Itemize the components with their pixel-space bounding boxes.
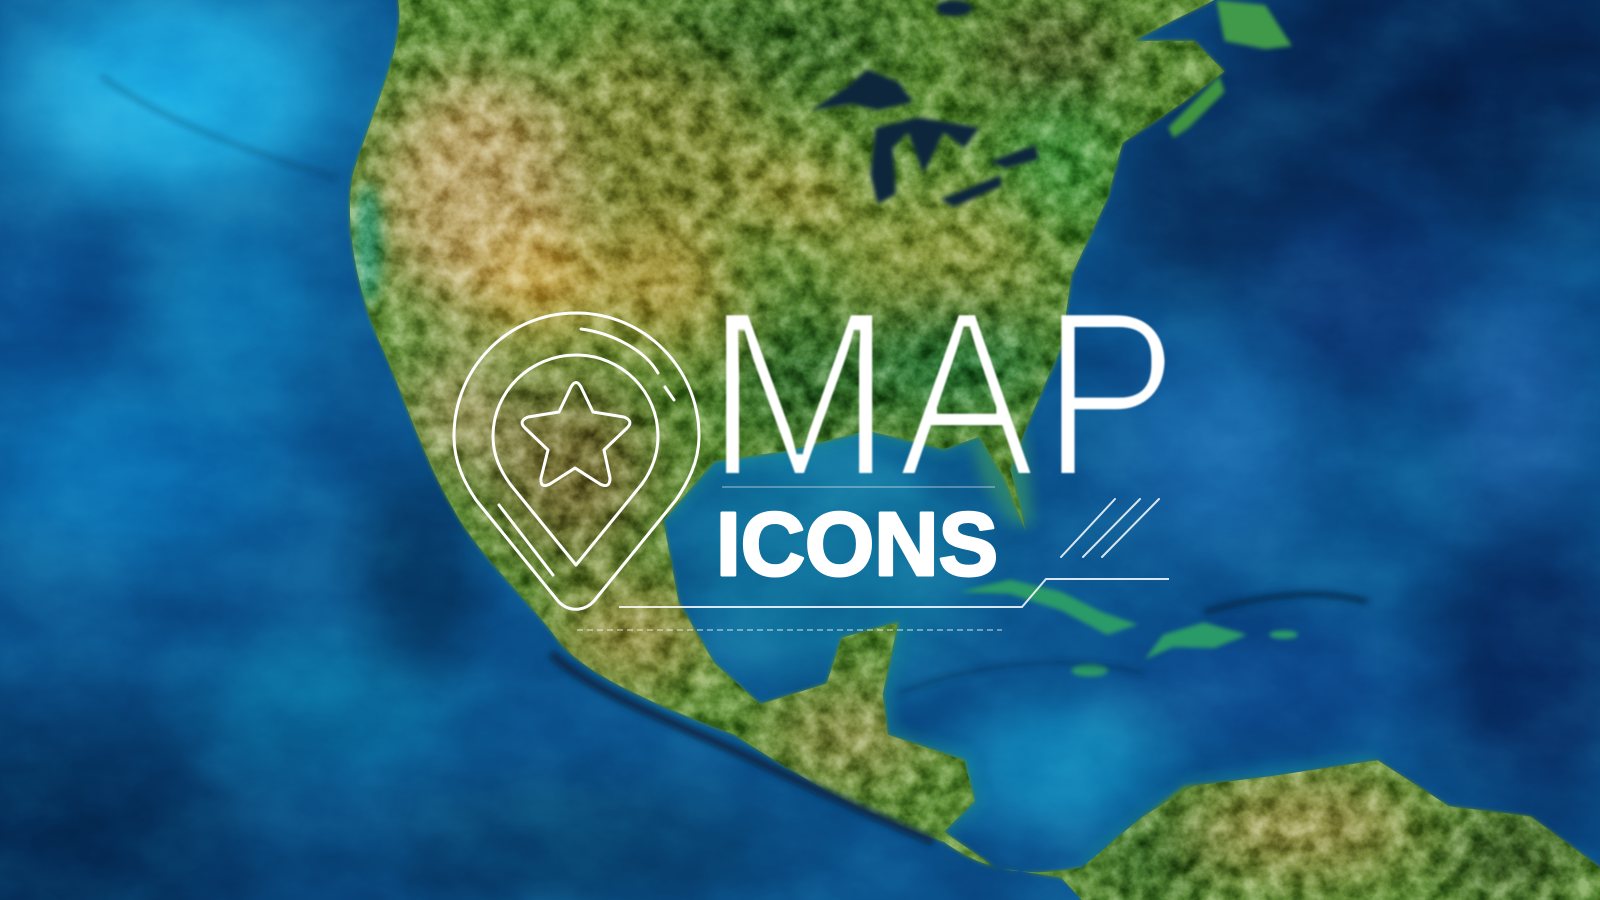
Greenland-side island [1216, 0, 1292, 49]
Great Lakes [811, 0, 1039, 207]
title: MAP [704, 261, 1178, 527]
dashed line [577, 629, 1002, 631]
land: North and Central America [350, 0, 1224, 900]
logo [454, 261, 1178, 630]
title: ICONS: ICONS [716, 495, 998, 595]
ocean trenches [102, 77, 1367, 842]
title: MAP: P [1042, 262, 1178, 527]
hatch lines [1061, 499, 1159, 557]
coastal shelf glow [663, 347, 1378, 867]
Caribbean islands [959, 580, 1298, 677]
divider under MAP [722, 486, 995, 488]
land texture [350, 0, 1600, 900]
icon: map pin with star [454, 313, 699, 609]
title: MAP: A [897, 262, 1036, 527]
underline [619, 579, 1169, 607]
land: South America [1082, 760, 1600, 900]
Florida peninsula [969, 434, 1033, 526]
Nova Scotia [1168, 77, 1224, 138]
title: MAP: M [704, 261, 894, 527]
land colour regions [350, 0, 1600, 900]
